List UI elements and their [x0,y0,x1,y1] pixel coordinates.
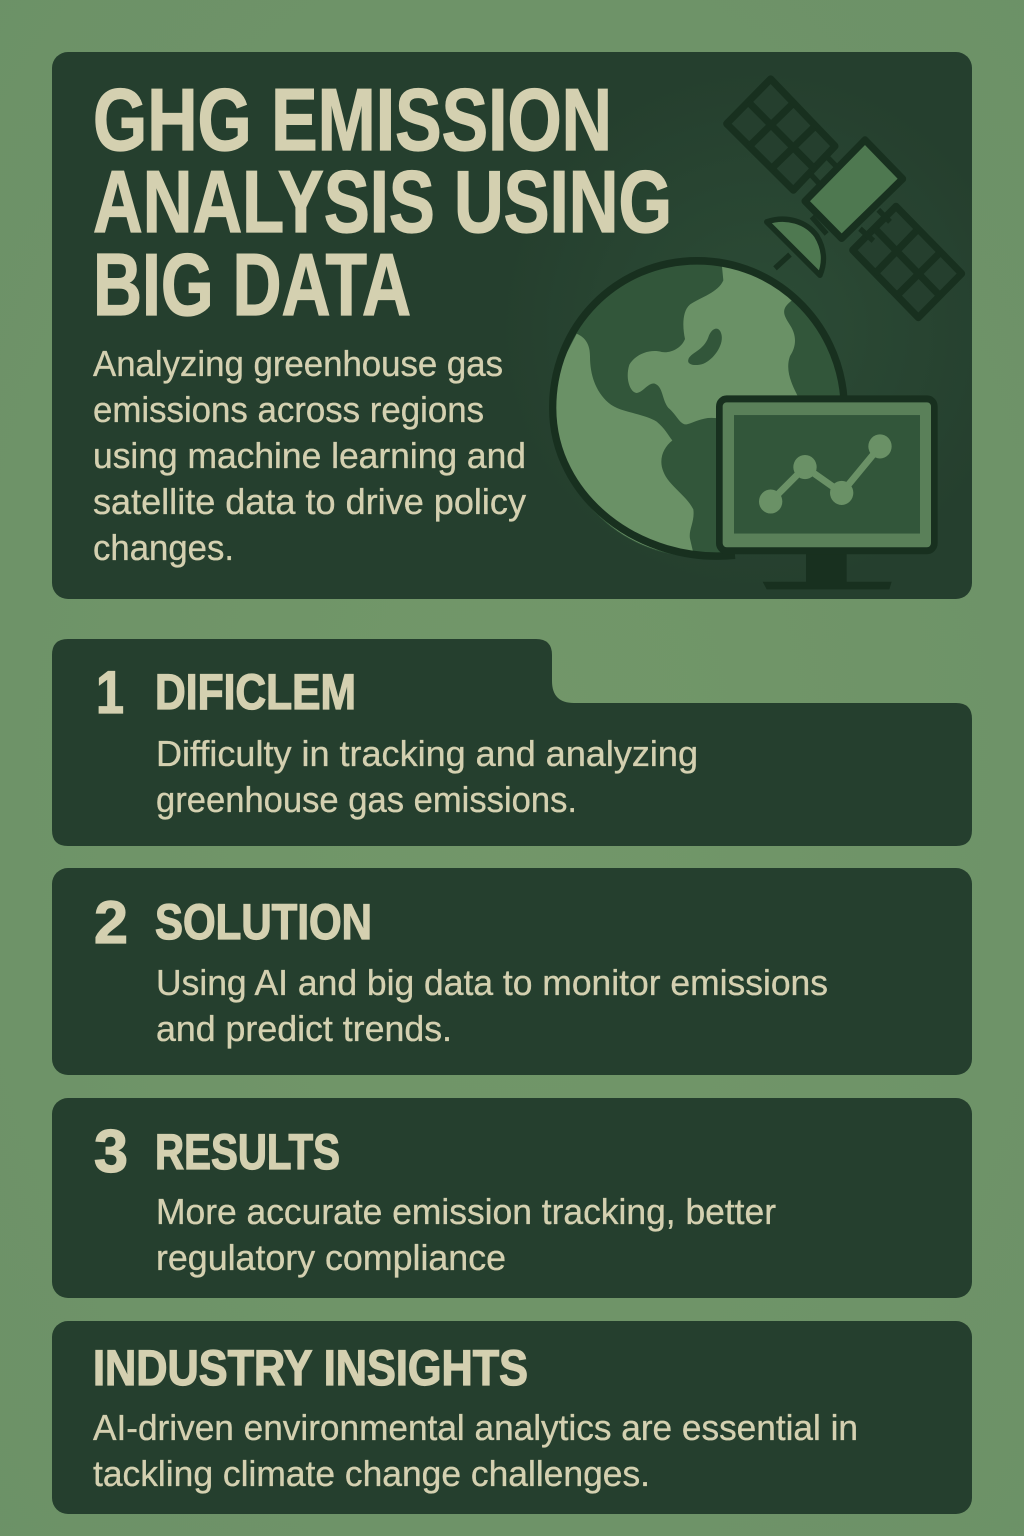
subtitle: Analyzing greenhouse gas [93,343,503,384]
heading: results: RESULTS [155,1124,340,1180]
text: problem description [156,733,698,820]
panel: header [52,52,972,599]
title: BIG DATA [93,235,411,334]
text: insights description: tackling climate change challenges. [93,1453,650,1494]
monitor stand [763,552,892,589]
title: GHG EMISSION [93,70,612,169]
panel: results [52,1098,972,1298]
icon: globe [540,259,844,559]
heading: industry insights: INDUSTRY INSIGHTS [93,1340,528,1396]
text: solution description: and predict trends. [156,1008,452,1049]
text: problem description: Difficulty in tracking and analyzing [156,733,698,774]
number 3: 3 [94,1118,128,1185]
number 1: 1 [96,659,124,726]
panel: problem [52,639,972,846]
icon: monitor with line chart [719,399,934,589]
heading: dificlem: DIFICLEM [155,664,356,720]
subtitle: using machine learning and [93,435,526,476]
subtitle: satellite data to drive policy [93,481,526,522]
subtitle [93,343,526,568]
panel: industry insights [52,1321,972,1514]
number 2: 2 [94,889,128,956]
text: results description [156,1191,776,1278]
text: insights description: AI-driven environmental analytics are essential in [93,1407,858,1448]
text: solution description [156,962,828,1049]
panel: solution [52,868,972,1075]
text: results description: More accurate emission tracking, better [156,1191,776,1232]
text: problem description: greenhouse gas emissions. [156,779,577,820]
icon: satellite [727,79,962,318]
title: ANALYSIS USING [93,152,672,251]
text: solution description: Using AI and big data to monitor emissions [156,962,828,1003]
text: insights description [93,1407,858,1494]
subtitle: emissions across regions [93,389,484,430]
subtitle: changes. [93,527,234,568]
heading: solution: SOLUTION [155,894,372,950]
line chart [759,434,892,514]
monitor screen [734,415,920,534]
text: results description: regulatory compliance [156,1237,506,1278]
monitor frame [719,399,934,551]
title [93,70,672,334]
